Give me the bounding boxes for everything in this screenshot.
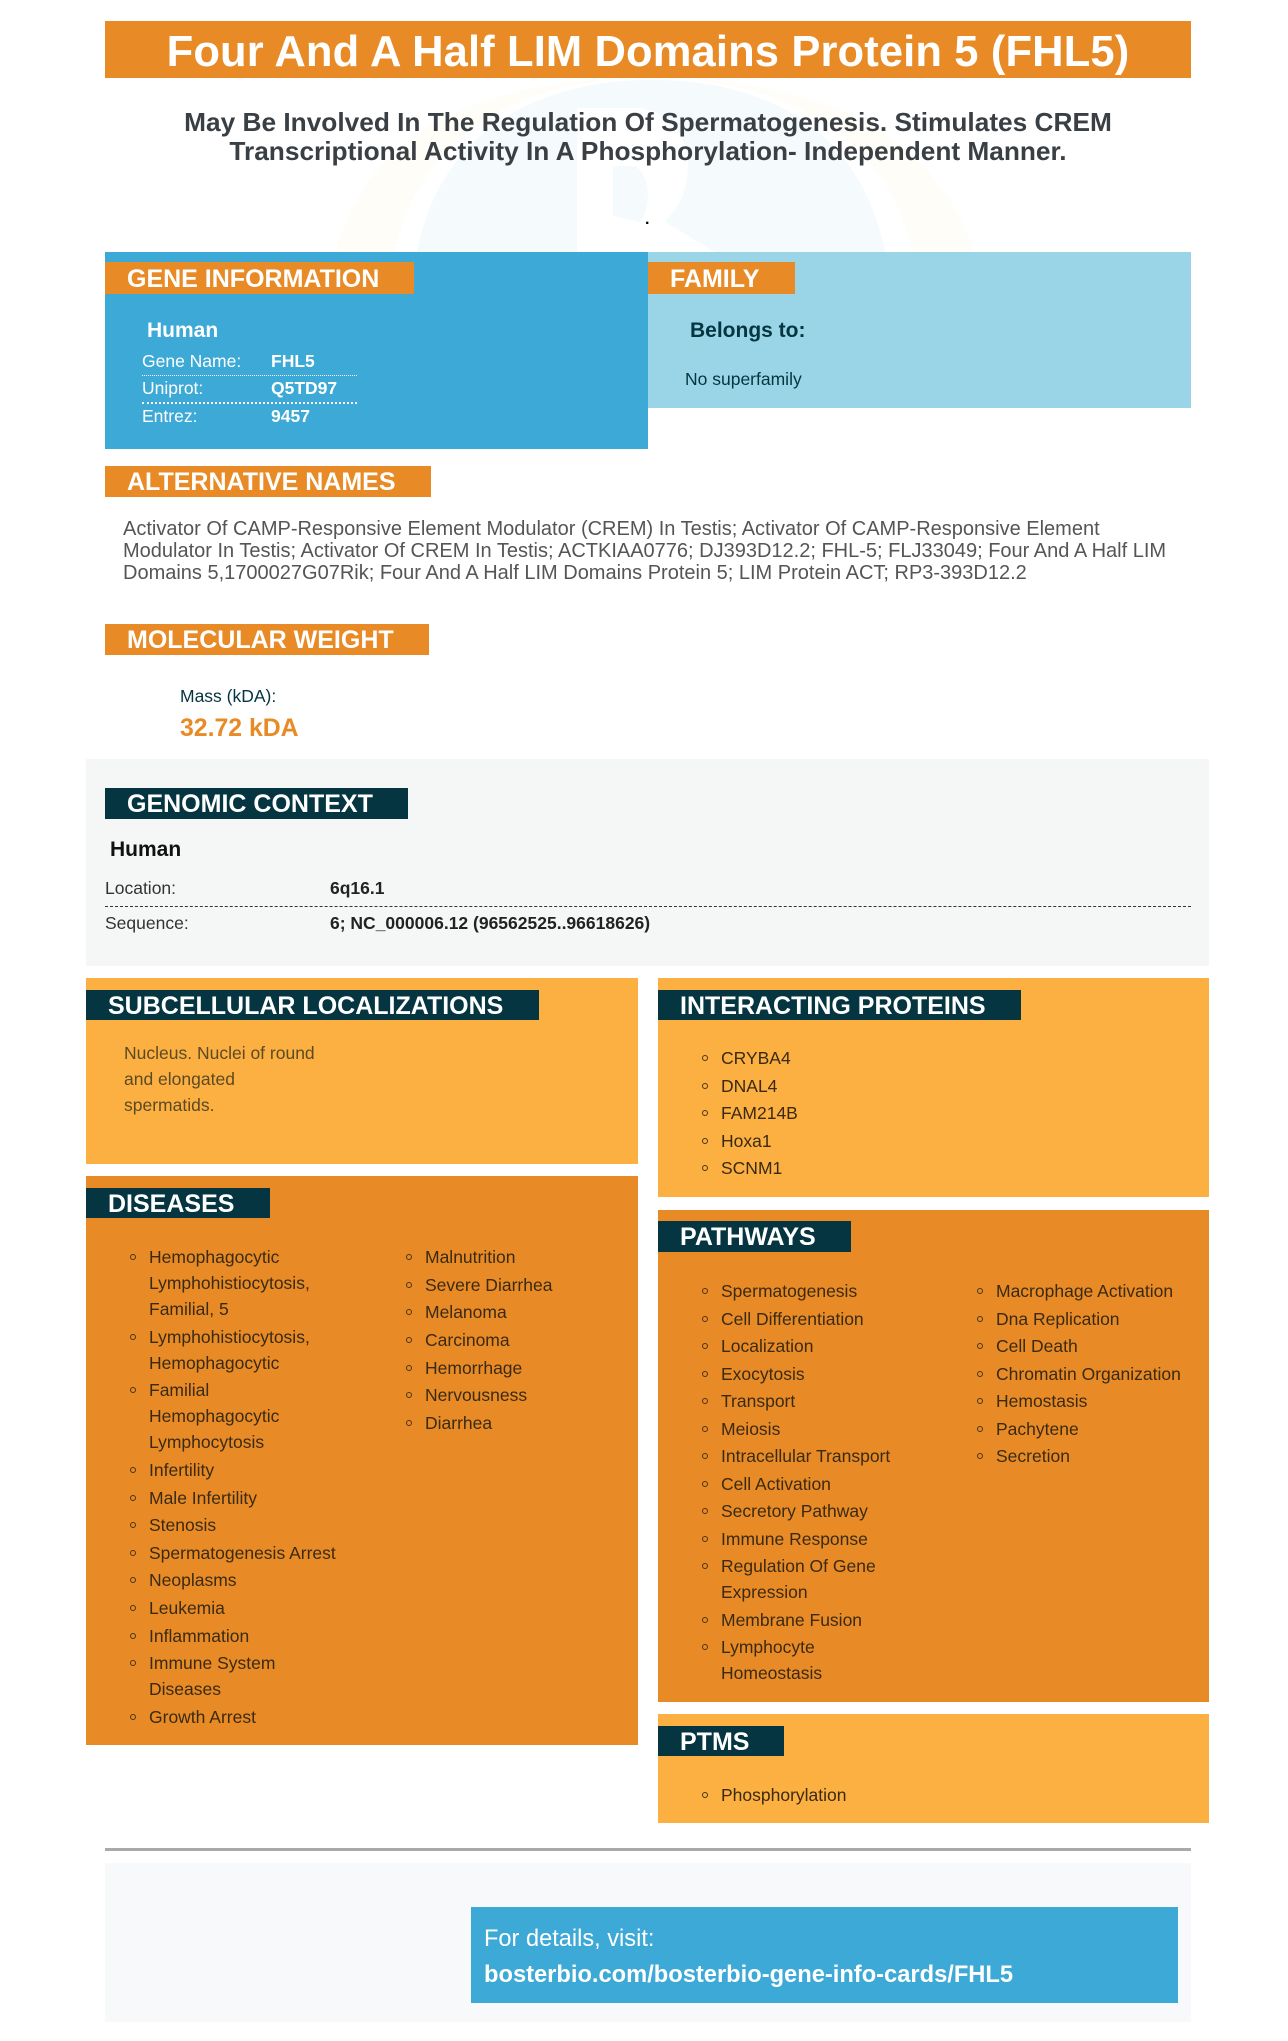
mass label: Mass (kDA): xyxy=(180,686,276,706)
subtitle description xyxy=(184,107,1112,166)
pathway list column 1: Transport xyxy=(721,1391,795,1411)
heading: family xyxy=(648,262,795,294)
pathway list column 1: Regulation Of Gene xyxy=(721,1556,876,1576)
pathway list column 1 xyxy=(702,1281,890,1683)
gene name row: Gene Name: xyxy=(142,351,241,371)
disease list column 1: Stenosis xyxy=(149,1515,216,1535)
panel: ptms xyxy=(658,1714,1209,1823)
disease list column 2: Diarrhea xyxy=(425,1413,492,1433)
disease list column 1: Leukemia xyxy=(149,1598,225,1618)
heading: interacting proteins: INTERACTING PROTEINS xyxy=(680,992,986,1020)
panel: diseases xyxy=(86,1176,638,1745)
callout label: For details, visit: xyxy=(484,1926,654,1952)
disease list column 1: Hemophagocytic xyxy=(149,1247,279,1267)
pathway list column 1: Homeostasis xyxy=(721,1663,822,1683)
disease list column 1: Male Infertility xyxy=(149,1488,257,1508)
disease list column 1: Lymphohistiocytosis, xyxy=(149,1327,310,1347)
uniprot row xyxy=(142,376,357,404)
entrez row xyxy=(142,406,310,426)
disease list column 1: Immune System xyxy=(149,1653,275,1673)
heading: diseases: DISEASES xyxy=(108,1190,234,1218)
disease list column 1: Familial xyxy=(149,1380,209,1400)
protein list: Hoxa1 xyxy=(721,1130,772,1150)
heading: pathways xyxy=(658,1221,851,1252)
disease list column 1: Diseases xyxy=(149,1679,221,1699)
superfamily value: No superfamily xyxy=(685,369,802,389)
alternative names text: Domains 5,1700027G07Rik; Four And A Half LIM Domains Protein 5; LIM Protein ACT; RP3-393D12.2 xyxy=(123,562,1027,584)
subtitle description: Transcriptional Activity In A Phosphorylation- Independent Manner. xyxy=(229,136,1067,166)
pathway list column 1: Spermatogenesis xyxy=(721,1281,857,1301)
pathway list column 1: Meiosis xyxy=(721,1418,780,1438)
disease list column 1: Growth Arrest xyxy=(149,1707,256,1727)
sequence row: 6; NC_000006.12 (96562525..96618626) xyxy=(330,913,650,933)
alternative names text xyxy=(123,518,1166,584)
pathway list column 1: Immune Response xyxy=(721,1528,868,1548)
heading: subcellular localizations: SUBCELLULAR LOCALIZATIONS xyxy=(108,992,503,1020)
panel: family xyxy=(648,252,1191,408)
ptm list: Phosphorylation xyxy=(721,1785,846,1805)
sequence row: Sequence: xyxy=(105,913,189,933)
panel: footer xyxy=(105,1863,1191,2022)
disease list column 1: Lymphocytosis xyxy=(149,1432,264,1452)
disease list column 1: Lymphohistiocytosis, xyxy=(149,1273,310,1293)
uniprot row: Uniprot: xyxy=(142,378,203,398)
localization text: and elongated xyxy=(124,1069,235,1089)
heading: molecular weight: MOLECULAR WEIGHT xyxy=(127,626,394,654)
disease list column 1: Hemophagocytic xyxy=(149,1353,279,1373)
pathway list column 1: Localization xyxy=(721,1336,813,1356)
panel: interacting proteins xyxy=(658,978,1209,1197)
pathway list column 1: Expression xyxy=(721,1582,808,1602)
disease list column 1: Infertility xyxy=(149,1460,214,1480)
alternative names text: Activator Of CAMP-Responsive Element Modulator (CREM) In Testis; Activator Of CAMP-Responsive Element xyxy=(123,518,1100,540)
disease list column 2: Malnutrition xyxy=(425,1247,515,1267)
location row xyxy=(105,875,1191,907)
disease list column 2: Melanoma xyxy=(425,1302,507,1322)
heading: pathways: PATHWAYS xyxy=(680,1223,816,1251)
pathway list column 2: Chromatin Organization xyxy=(996,1364,1181,1384)
pathway list column 2: Secretion xyxy=(996,1446,1070,1466)
uniprot row: Q5TD97 xyxy=(271,378,337,398)
panel: subcellular localizations xyxy=(86,978,638,1164)
protein list: CRYBA4 xyxy=(721,1048,791,1068)
sequence row xyxy=(105,913,650,933)
protein list: SCNM1 xyxy=(721,1158,782,1178)
panel: genomic context xyxy=(86,759,1209,966)
localization text: spermatids. xyxy=(124,1095,214,1115)
disease list column 2: Nervousness xyxy=(425,1385,527,1405)
heading: alternative names: ALTERNATIVE NAMES xyxy=(127,468,396,496)
protein list: DNAL4 xyxy=(721,1076,777,1096)
pathway list column 2 xyxy=(977,1281,1181,1466)
entrez row: 9457 xyxy=(271,406,310,426)
location row: Location: xyxy=(105,878,176,898)
panel: pathways xyxy=(658,1210,1209,1702)
protein list xyxy=(702,1048,798,1178)
callout: details link xyxy=(471,1907,1178,2003)
heading: gene information: GENE INFORMATION xyxy=(127,265,379,293)
panel: gene information xyxy=(105,252,648,449)
pathway list column 2: Cell Death xyxy=(996,1336,1078,1356)
pathway list column 1: Cell Activation xyxy=(721,1474,831,1494)
disease list column 1: Familial, 5 xyxy=(149,1299,229,1319)
pathway list column 1: Cell Differentiation xyxy=(721,1308,864,1328)
pathway list column 1: Lymphocyte xyxy=(721,1637,815,1657)
pathway list column 1: Exocytosis xyxy=(721,1364,805,1384)
species label: Human xyxy=(110,838,181,861)
small dot mark: . xyxy=(645,211,649,228)
pathway list column 1: Secretory Pathway xyxy=(721,1501,868,1521)
pathway list column 1: Membrane Fusion xyxy=(721,1610,862,1630)
alternative names text: Modulator In Testis; Activator Of CREM In Testis; ACTKIAA0776; DJ393D12.2; FHL-5; FLJ33049; Four And A Half LIM xyxy=(123,540,1166,562)
background watermark logo xyxy=(417,80,885,252)
disease list column 1: Neoplasms xyxy=(149,1570,237,1590)
disease list column 1: Hemophagocytic xyxy=(149,1406,279,1426)
disease list column 1: Spermatogenesis Arrest xyxy=(149,1543,336,1563)
protein list: FAM214B xyxy=(721,1103,798,1123)
heading: diseases xyxy=(86,1188,270,1218)
gene name row xyxy=(142,348,357,376)
heading: ptms xyxy=(658,1726,784,1756)
disease list column 2: Severe Diarrhea xyxy=(425,1275,552,1295)
disease list column 2: Hemorrhage xyxy=(425,1358,522,1378)
disease list column 2 xyxy=(406,1247,552,1433)
disease list column 1 xyxy=(130,1247,336,1727)
heading: family: FAMILY xyxy=(670,265,759,293)
heading: ptms: PTMS xyxy=(680,1728,749,1756)
location row: 6q16.1 xyxy=(330,878,384,898)
disease list column 2: Carcinoma xyxy=(425,1330,510,1350)
localization text xyxy=(124,1043,315,1115)
pathway list column 2: Hemostasis xyxy=(996,1391,1087,1411)
pathway list column 2: Macrophage Activation xyxy=(996,1281,1173,1301)
title banner: Four And A Half LIM Domains Protein 5 (FHL5) xyxy=(167,28,1129,76)
pathway list column 2: Dna Replication xyxy=(996,1308,1120,1328)
pathway list column 1: Intracellular Transport xyxy=(721,1446,890,1466)
callout url: bosterbio.com/bosterbio-gene-info-cards/FHL5 xyxy=(484,1962,1013,1988)
localization text: Nucleus. Nuclei of round xyxy=(124,1043,315,1063)
disease list column 1: Inflammation xyxy=(149,1626,249,1646)
belongs to label: Belongs to: xyxy=(690,319,806,342)
heading: genomic context: GENOMIC CONTEXT xyxy=(127,790,373,818)
pathway list column 2: Pachytene xyxy=(996,1418,1079,1438)
mass value: 32.72 kDA xyxy=(180,715,299,742)
subtitle description: May Be Involved In The Regulation Of Spermatogenesis. Stimulates CREM xyxy=(184,107,1112,137)
entrez row: Entrez: xyxy=(142,406,197,426)
species label: Human xyxy=(147,319,218,342)
gene name row: FHL5 xyxy=(271,351,315,371)
